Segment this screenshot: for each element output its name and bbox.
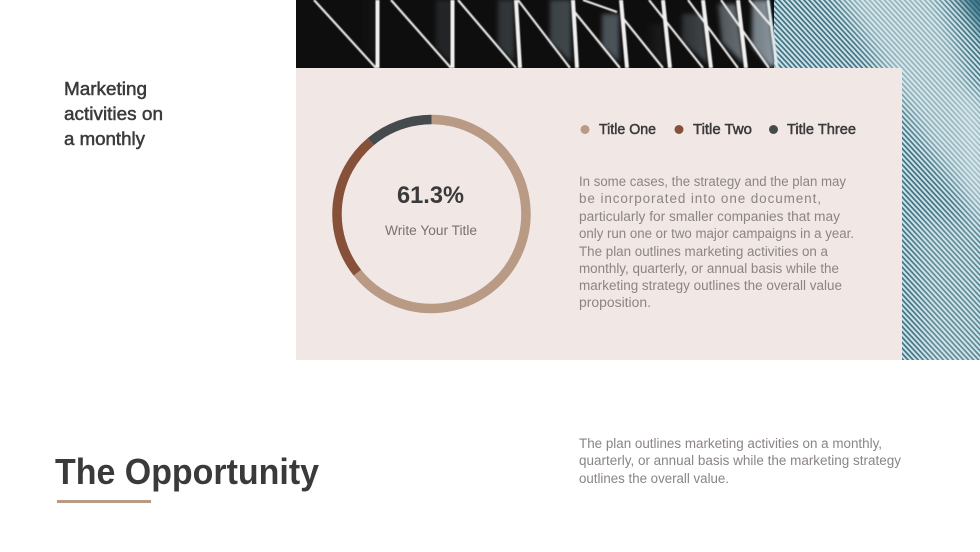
donut value: 61.3% bbox=[397, 182, 464, 209]
panel: pink background bbox=[296, 68, 902, 360]
photo: architectural facade bbox=[296, 0, 980, 370]
bottom description text: quarterly, or annual basis while the marketing strategy bbox=[579, 453, 901, 468]
legend item: title three: Title Three bbox=[787, 122, 856, 138]
panel body text: only run one or two major campaigns in a year. bbox=[579, 226, 854, 241]
bottom description text bbox=[579, 436, 901, 486]
left heading: marketing activities: activities on bbox=[64, 103, 163, 124]
photo area: dark triangular lattice bbox=[296, 0, 777, 68]
legend item: title two: Title Two bbox=[693, 122, 752, 138]
title underline bbox=[57, 500, 151, 503]
panel body text: particularly for smaller companies that may bbox=[579, 209, 840, 224]
donut segment: charcoal bbox=[371, 120, 432, 142]
donut chart bbox=[337, 120, 526, 308]
donut segment: tan bbox=[357, 120, 526, 308]
bottom description text: outlines the overall value. bbox=[579, 471, 729, 486]
bottom description text: The plan outlines marketing activities on a monthly, bbox=[579, 436, 882, 451]
title: The Opportunity bbox=[55, 451, 319, 492]
legend item: title one: Title One bbox=[599, 122, 656, 138]
panel body text: be incorporated into one document, bbox=[579, 191, 821, 206]
left heading: marketing activities bbox=[64, 78, 163, 149]
panel body text: The plan outlines marketing activities on a bbox=[579, 244, 828, 259]
donut caption: Write Your Title bbox=[385, 223, 477, 238]
photo area: teal striped facade bbox=[770, 0, 980, 370]
left heading: marketing activities: a monthly bbox=[64, 128, 146, 149]
panel body text: In some cases, the strategy and the plan may bbox=[579, 174, 846, 189]
left heading: marketing activities: Marketing bbox=[64, 78, 147, 99]
panel body text: proposition. bbox=[579, 295, 651, 310]
panel body text: marketing strategy outlines the overall value bbox=[579, 278, 842, 293]
legend bbox=[580, 122, 856, 138]
panel body text: monthly, quarterly, or annual basis while the bbox=[579, 261, 839, 276]
panel body text bbox=[579, 174, 854, 310]
donut segment: brown bbox=[337, 142, 371, 273]
